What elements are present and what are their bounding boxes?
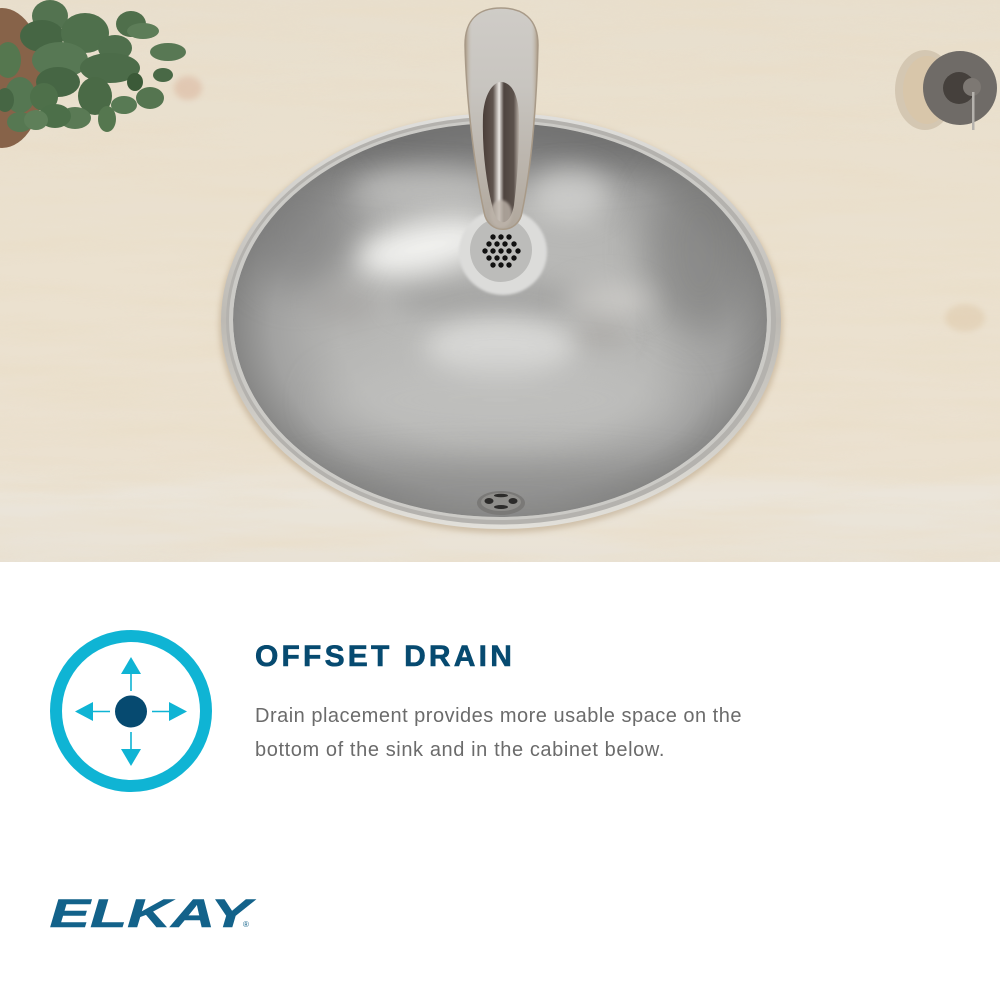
logo: Elkay: ® [243, 920, 249, 929]
bottom drain [477, 491, 525, 515]
product photo: sink on marble counter [0, 0, 1000, 562]
logo: Elkay: ELKAY [50, 890, 257, 936]
sink bowl [233, 97, 767, 517]
soap dispenser [895, 50, 997, 130]
body text [255, 704, 742, 760]
sink rim [219, 113, 783, 533]
plant in copper pot [0, 0, 186, 148]
faucet [465, 8, 538, 229]
body text: bottom of the sink and in the cabinet below. [255, 738, 665, 760]
overflow drain [459, 209, 547, 295]
heading: OFFSET DRAIN [255, 640, 515, 673]
countertop [0, 0, 1000, 562]
body text: Drain placement provides more usable space on the [255, 704, 742, 726]
